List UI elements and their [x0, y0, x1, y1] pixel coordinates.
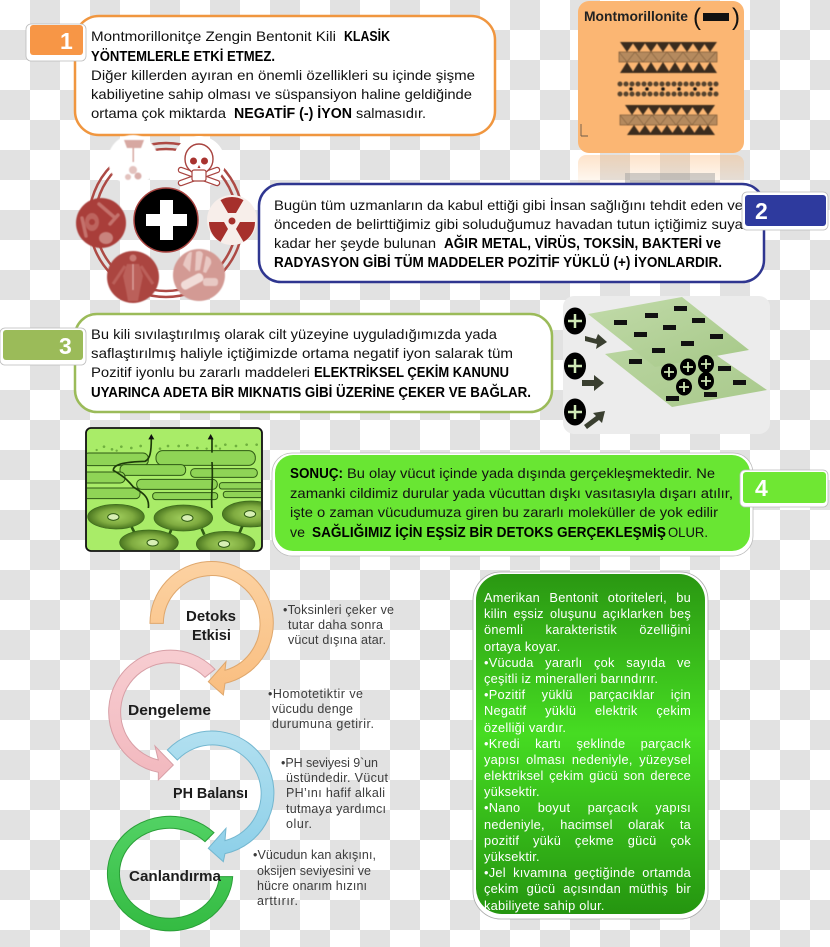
badge: 1: 1: [60, 28, 73, 54]
text: American Bentonite authorities list: yapısı olması nedeniyle, yüzeysel: [484, 752, 691, 767]
badge: 3: 3: [59, 333, 72, 359]
panel: step 2 text box: [259, 184, 764, 282]
text: step 1: salmasıdır.: [356, 105, 426, 121]
text: American Bentonite authorities list: Amerikan Bentonit otoriteleri, bu: [484, 590, 691, 605]
text: pH note: olur.: [286, 817, 312, 831]
text: American Bentonite authorities list: kilin eşsiz oluşunu açıklarken beş: [484, 606, 691, 621]
text: American Bentonite authorities list: yüksektir.: [484, 849, 540, 864]
text: step 1: YÖNTEMLERLE ETKİ ETMEZ.: [91, 48, 275, 65]
text: step 1: Montmorillonitçe Zengin Bentonit Kili: [91, 28, 336, 44]
cycle diagram: arrows: [107, 561, 274, 931]
label: Detoks Etkisi: [186, 609, 236, 644]
text: American Bentonite authorities list: •Kredi kartı şeklinde parçacık: [484, 736, 691, 751]
negative charge symbol: [693, 4, 740, 31]
text: American Bentonite authorities list: pozitif yükü çekme gücü çok: [484, 833, 691, 848]
panel: montmorillonite structure: [578, 1, 744, 191]
text: conclusion: [290, 465, 733, 541]
text: American Bentonite authorities list: yüksektir.: [484, 784, 540, 799]
badge: 2: 2: [755, 198, 768, 224]
arrow: pink ring: [109, 650, 215, 780]
text: step 2: [274, 196, 743, 271]
nuclei: [108, 511, 256, 547]
text: pH note: üstündedir. Vücut: [286, 771, 389, 785]
text: step 1: [91, 28, 475, 122]
text: pH note: [281, 756, 389, 831]
text: revitalization note: oksijen seviyesini ve: [257, 864, 371, 878]
text: American Bentonite authorities list: çekim gücü açısından müthiş bir: [484, 881, 691, 896]
text: step 2: RADYASYON GİBİ TÜM MADDELER POZİTİF YÜKLÜ (+) İYONLARDIR.: [274, 254, 722, 271]
free positive ions: [564, 308, 586, 426]
text: conclusion: SAĞLIĞIMIZ İÇİN EŞSİZ BİR DETOKS GERÇEKLEŞMİŞ: [312, 523, 666, 541]
icon: skull: [173, 136, 225, 188]
illustration: skin cross-section: [85, 427, 263, 552]
connectors: [132, 525, 243, 535]
label: Dengeleme: Dengeleme: [128, 703, 211, 719]
arrow: orange ring: [150, 561, 273, 695]
text: conclusion: işte o zaman vücudumuza giren bu zararlı moleküller de yok edilir: [290, 504, 718, 520]
text: conclusion: ve: [290, 524, 305, 540]
diagram: ions attracted to clay plates: [563, 296, 770, 434]
text: step 2: AĞIR METAL, VİRÜS, TOKSİN, BAKTERİ ve: [444, 234, 721, 252]
text: revitalization note: hücre onarım hızını: [257, 879, 367, 893]
text: conclusion: OLUR.: [668, 524, 708, 540]
arrows: [582, 334, 607, 429]
text: balance note: durumuna getirir.: [272, 717, 374, 731]
text: step 3: Pozitif iyonlu bu zararlı maddeleri: [91, 364, 310, 380]
text: pH note: •PH seviyesi 9`un: [281, 756, 378, 770]
label: Detoks Etkisi: Etkisi: [192, 628, 231, 644]
badge: 2: [742, 192, 828, 230]
basal cells: [87, 500, 261, 550]
text: pH note: tutmaya yardımcı: [286, 802, 386, 816]
text: revitalization note: [253, 848, 376, 908]
icon: human body: [107, 251, 159, 303]
text: detox note: vücut dışına atar.: [288, 633, 386, 647]
text: balance note: •Homotetiktir ve: [268, 687, 363, 701]
panel: step 4 conclusion: [272, 453, 753, 556]
text: conclusion: Bu olay vücut içinde yada dışında gerçekleşmektedir. Ne: [347, 465, 715, 481]
arrow: green ring: [107, 816, 233, 931]
badge: 3: [0, 328, 86, 365]
text: step 1: NEGATİF (-) İYON: [234, 105, 352, 122]
icon: pills: [173, 249, 225, 301]
text: American Bentonite authorities list: Negatif yüklü elektrik çekim: [484, 703, 691, 718]
text: American Bentonite authorities list: elektriksel çekim gücü son derece: [484, 768, 691, 783]
badge: 4: [740, 470, 828, 507]
surface particles: [95, 443, 258, 452]
text: detox note: tutar daha sonra: [288, 618, 383, 632]
text: conclusion: zamanki cildimiz durular yada vücuttan dışkı vasıtasıyla dışarı atılır,: [290, 485, 733, 501]
text: step 1: Diğer killerden ayıran en önemli özellikleri su içinde şişme: [91, 67, 475, 83]
text: step 2: önceden de belirttiğimiz gibi soluduğumuz havadan tutun içtiğimiz suya: [274, 216, 743, 232]
text: American Bentonite authorities list: özelliği vardır.: [484, 720, 566, 734]
text: step 3: UYARINCA ADETA BİR MIKNATIS GİBİ ÜZERİNE ÇEKER VE BAĞLAR.: [91, 383, 531, 401]
text: step 1: KLASİK: [344, 28, 390, 45]
text: detox note: [283, 603, 394, 647]
badge: 4: 4: [755, 475, 768, 501]
negative charge symbol: ): [732, 4, 740, 31]
text: step 2: kadar her şeyde bulunan: [274, 235, 436, 251]
interlayer cations: [618, 82, 718, 96]
text: pH note: PH’ını hafif alkali: [286, 786, 385, 800]
text: balance note: vücudu denge: [272, 702, 353, 716]
text: American Bentonite authorities list: •Vücuda yararlı çok sayıda ve: [484, 655, 691, 670]
label: Canlandırma: Canlandırma: [129, 869, 222, 885]
text: American Bentonite authorities list: nedeniyle, hacimsel olarak ta: [484, 817, 691, 832]
icon: radiation: [207, 195, 257, 245]
text: American Bentonite authorities list: •Pozitif yüklü parçacıklar için: [484, 687, 691, 702]
text: step 1: ortama çok miktarda: [91, 105, 226, 121]
heading: Montmorillonite: Montmorillonite: [584, 8, 688, 24]
icon: microbes: [76, 198, 126, 248]
label: PH Balansı: PH Balansı: [173, 786, 248, 802]
flattened skin cells: [82, 451, 267, 500]
text: American Bentonite authorities list: önemli karakteristik özelliğini: [484, 622, 691, 637]
arrow: blue ring: [167, 731, 274, 862]
text: step 1: kabiliyetine sahip olması ve süspansiyon haline geldiğinde: [91, 86, 472, 102]
text: American Bentonite authorities list: [484, 590, 691, 913]
text: balance note: [268, 687, 374, 731]
icon: plus sign: [134, 188, 198, 252]
text: step 3: ELEKTRİKSEL ÇEKİM KANUNU: [314, 364, 509, 381]
upper clay layer: [619, 42, 717, 73]
text: conclusion: SONUÇ:: [290, 466, 343, 482]
text: American Bentonite authorities list: •Jel kıvamına geçtiğinde ortamda: [484, 865, 691, 880]
graphic: positive ion hazards ring: [76, 135, 257, 303]
reflection of mineral panel: [578, 155, 744, 191]
text: step 3: Bu kili sıvılaştırılmış olarak cilt yüzeyine uyguladığımızda yada: [91, 326, 497, 342]
text: step 3: [91, 326, 531, 401]
text: detox note: •Toksinleri çeker ve: [283, 603, 394, 617]
arrows through skin: [113, 439, 212, 508]
text: revitalization note: •Vücudun kan akışını,: [253, 848, 376, 862]
text: American Bentonite authorities list: •Nano boyut parçacık yapısı: [484, 800, 691, 815]
text: step 2: Bugün tüm uzmanların da kabul ettiği gibi İnsan sağlığını tehdit eden ve: [274, 196, 743, 213]
text: American Bentonite authorities list: kabiliyete sahip olur.: [484, 898, 605, 913]
lower clay plate: [605, 347, 767, 407]
text: American Bentonite authorities list: ortaya koyar.: [484, 639, 561, 654]
negative charges: [614, 306, 746, 401]
text: revitalization note: arttırır.: [257, 894, 298, 908]
panel: step 3 text box: [75, 314, 552, 412]
upper clay plate: [588, 297, 749, 367]
text: step 3: saflaştırılmış haliyle içtiğimizde ortama negatif iyon salarak tüm: [91, 345, 513, 361]
ring: [89, 143, 243, 297]
icon: food and drink: [108, 135, 158, 185]
badge: 1: [26, 24, 86, 61]
axis: [581, 124, 588, 136]
panel: step 1 text box: [75, 16, 495, 135]
label: Detoks Etkisi: Detoks: [186, 609, 236, 625]
bound positive ions: [661, 355, 714, 396]
panel: green card background: [473, 572, 708, 919]
text: American Bentonite authorities list: çeşitli iz mineralleri barındırır.: [484, 671, 658, 686]
negative charge symbol: (: [693, 4, 701, 31]
lower clay layer: [620, 105, 717, 135]
